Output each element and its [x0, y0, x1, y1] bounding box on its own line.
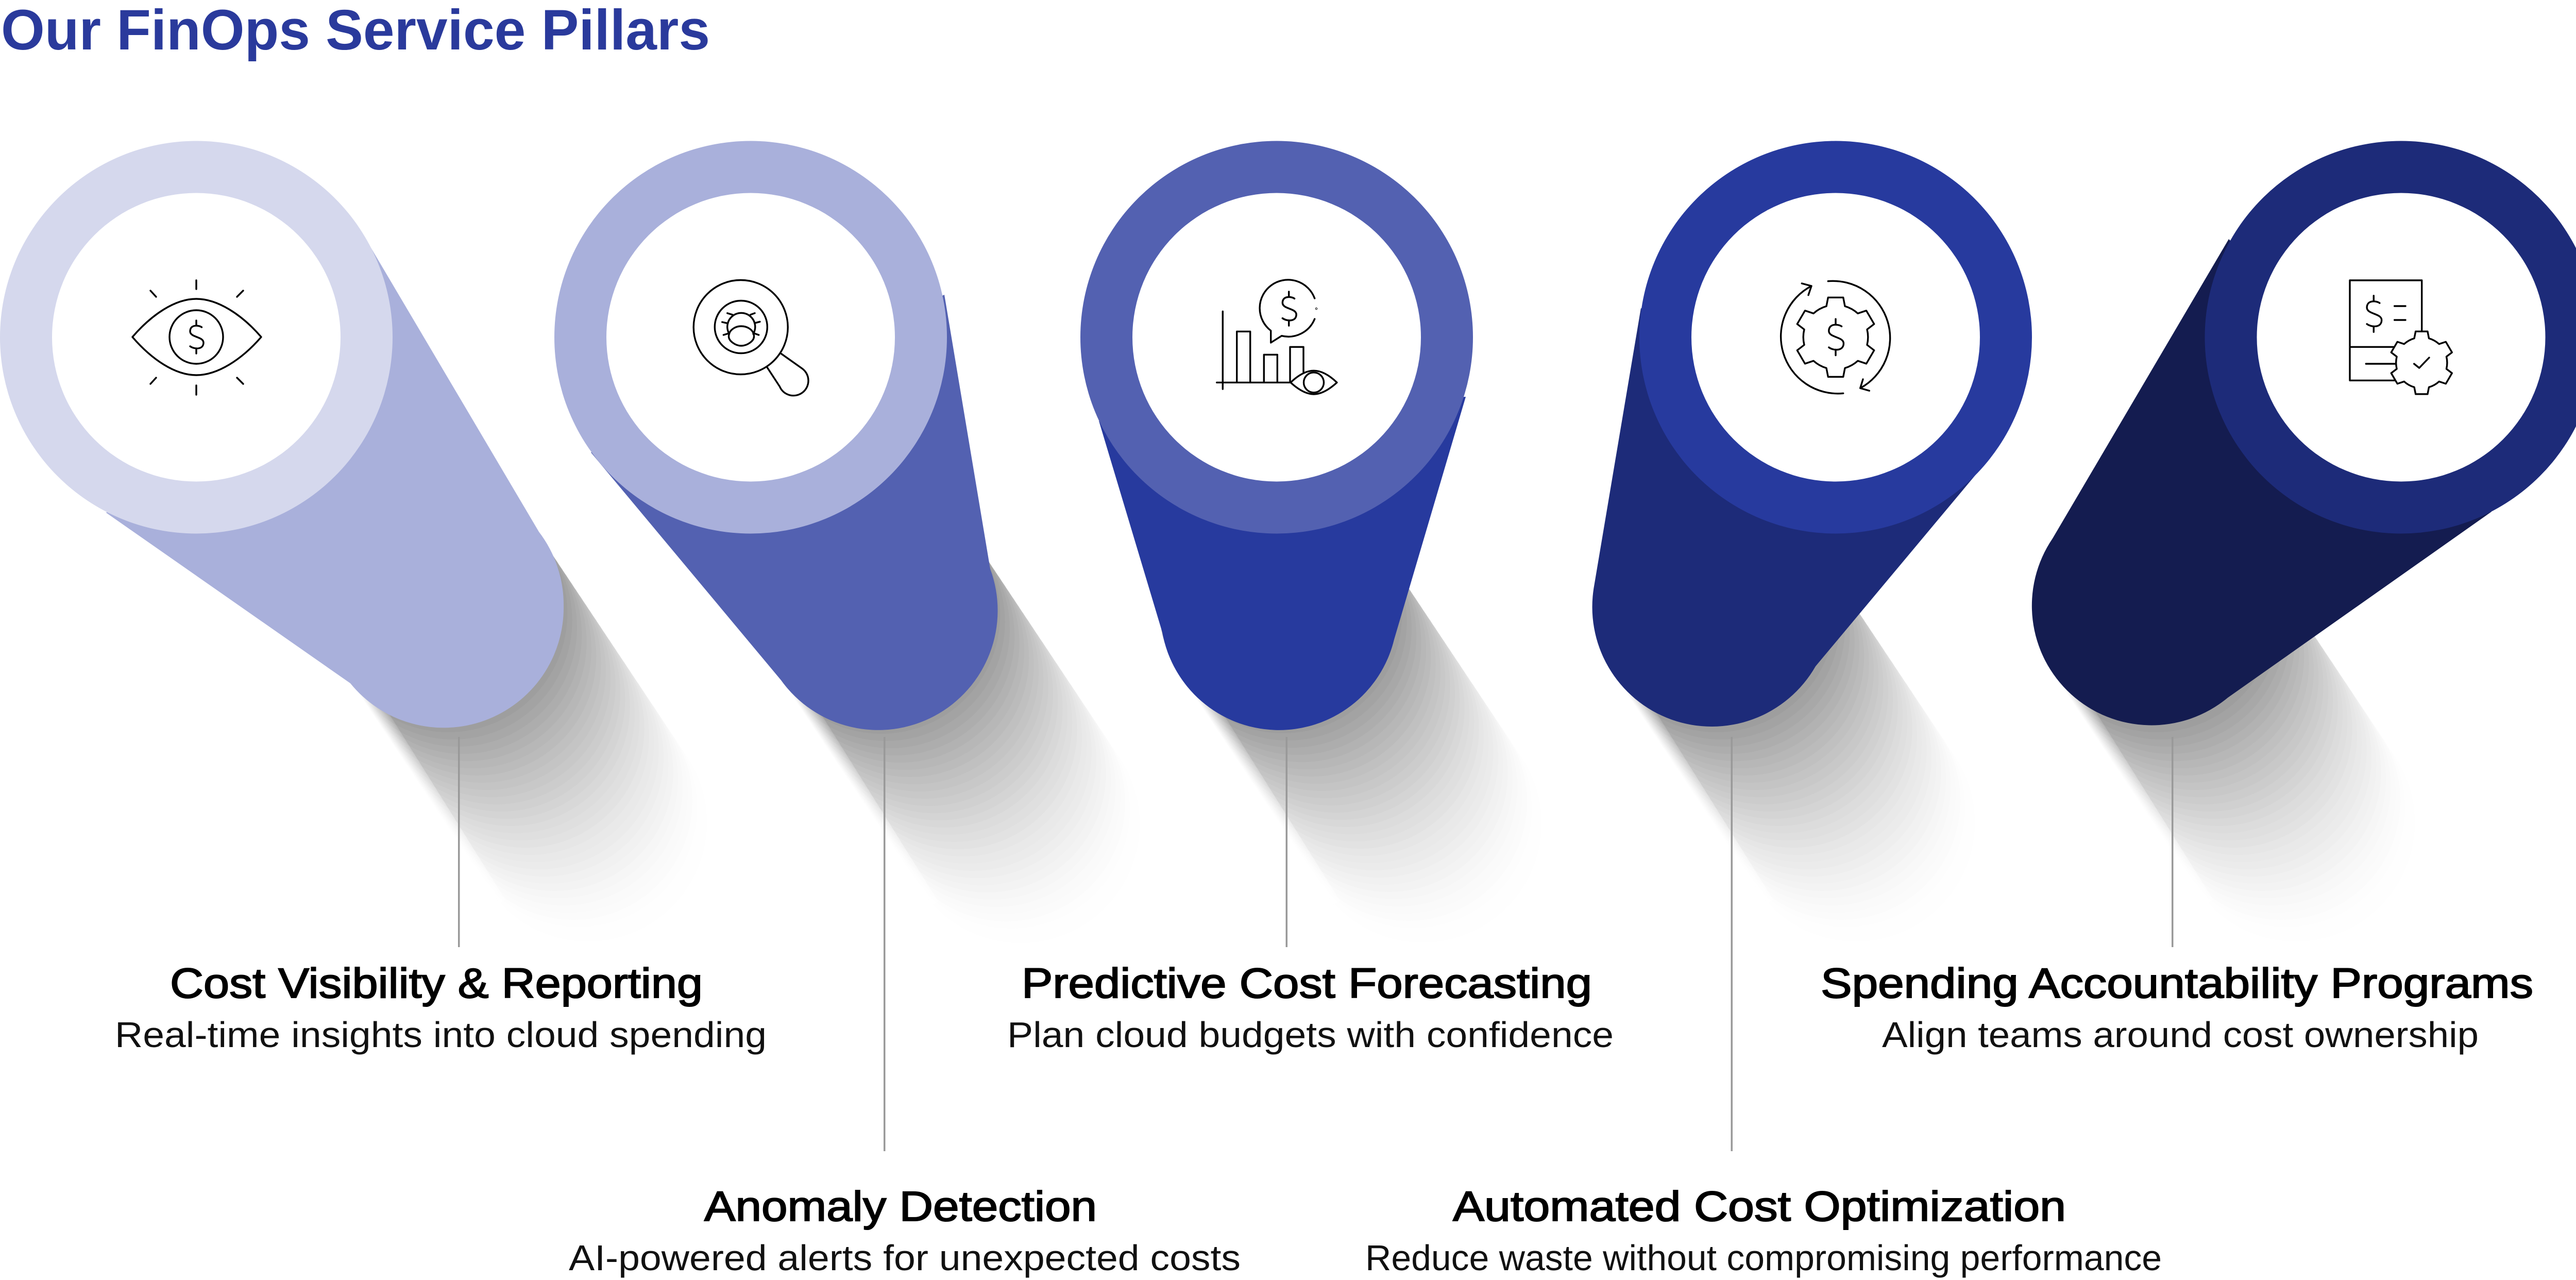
shadow: pillar 5	[2032, 487, 2415, 941]
ring: pillar 1	[0, 141, 393, 534]
ring: pillar 2	[554, 141, 947, 534]
connector line: pillar 4	[1731, 737, 1733, 1151]
description: pillar 5: Align teams around cost ownership	[1882, 1015, 2479, 1055]
icon: magnifier with bug	[693, 280, 808, 396]
shadow: pillar 1	[325, 487, 707, 941]
panel: pillar 5 Spending Accountability Programs	[1821, 141, 2576, 1055]
title: Our FinOps Service Pillars	[1, 0, 710, 62]
panel: pillar 1 Cost Visibility & Reporting	[0, 141, 767, 1055]
panel: pillar 2 Anomaly Detection	[554, 141, 1241, 1278]
connector line: pillar 5	[2172, 737, 2173, 947]
capsule: pillar 2	[591, 295, 998, 730]
heading: pillar 5: Spending Accountability Programs	[1821, 960, 2533, 1007]
icon: eye with dollar	[132, 280, 261, 395]
ring: pillar 5	[2205, 141, 2576, 534]
icon circle: pillar 4	[1691, 193, 1980, 481]
description: pillar 1: Real-time insights into cloud spending	[115, 1015, 767, 1055]
heading: pillar 2: Anomaly Detection	[704, 1183, 1097, 1230]
shadow: pillar 2	[757, 489, 1140, 943]
connector line: pillar 1	[458, 737, 460, 947]
description: pillar 3: Plan cloud budgets with confidence	[1007, 1015, 1614, 1055]
description: pillar 4: Reduce waste without compromising performance	[1365, 1238, 2162, 1278]
heading: pillar 3: Predictive Cost Forecasting	[1022, 960, 1592, 1007]
icon: dollar gear with cycle arrows	[1781, 281, 1890, 394]
icon circle: pillar 2	[606, 193, 895, 481]
shadow: pillar 4	[1592, 487, 1975, 941]
heading: pillar 4: Automated Cost Optimization	[1453, 1183, 2066, 1230]
panel: pillar 4 Automated Cost Optimization	[1365, 141, 2162, 1278]
ring: pillar 3	[1080, 141, 1473, 534]
ring: pillar 4	[1639, 141, 2032, 534]
shadow: pillar 3	[1159, 488, 1541, 942]
icon circle: pillar 3	[1132, 193, 1421, 481]
capsule: pillar 4	[1592, 308, 1976, 727]
panel: pillar 3 Predictive Cost Forecasting	[1007, 141, 1614, 1055]
icon circle: pillar 5	[2257, 193, 2545, 481]
capsule: pillar 3	[1099, 397, 1466, 730]
heading: pillar 1: Cost Visibility & Reporting	[170, 960, 703, 1007]
capsule: pillar 5	[2032, 239, 2492, 725]
connector line: pillar 3	[1286, 737, 1287, 947]
icon circle: pillar 1	[52, 193, 341, 481]
capsule: pillar 1	[106, 242, 564, 728]
connector line: pillar 2	[884, 737, 885, 1151]
icon: invoice with check gear	[2350, 280, 2452, 394]
description: pillar 2: AI-powered alerts for unexpected costs	[569, 1238, 1241, 1278]
icon: bar chart, dollar bubble and eye	[1217, 280, 1337, 394]
